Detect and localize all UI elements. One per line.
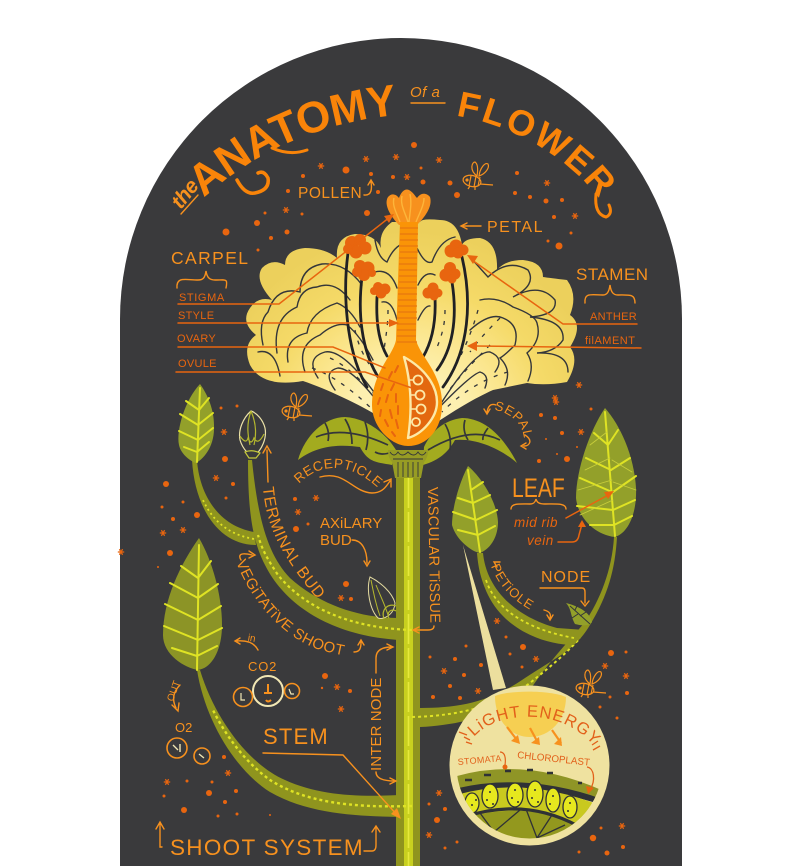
chloroplast pointer <box>587 767 594 790</box>
petiole label: PETiOLE <box>491 564 534 610</box>
vascular arrow <box>413 626 434 633</box>
shoot system arrows <box>156 822 380 851</box>
leaf: lower left <box>163 538 222 670</box>
vascular tissue label: VASCULAR TiSSUE <box>424 487 442 623</box>
title underline <box>181 195 198 214</box>
oxygen labels: OUT <box>165 679 183 703</box>
title <box>167 84 614 219</box>
stigma label: STIGMA <box>179 292 225 304</box>
ovule label: OVULE <box>178 358 217 370</box>
ovary label: OVARY <box>177 333 216 345</box>
pistil <box>372 189 442 446</box>
stomata pores <box>465 770 582 783</box>
stem core <box>404 475 413 866</box>
carpel brace <box>177 271 227 288</box>
style label: STYLE <box>178 310 214 322</box>
terminal bud label: TERMINAL BUD <box>263 486 324 597</box>
branch: lower left <box>197 670 412 817</box>
carpel labels <box>171 214 412 388</box>
petal contour lines left <box>258 240 400 412</box>
title swash under R <box>596 194 610 217</box>
lower veins <box>480 809 565 838</box>
stamens <box>343 234 468 387</box>
arch background <box>120 38 682 866</box>
ovules <box>410 380 417 422</box>
anthers <box>343 234 468 300</box>
internode label: INTER NODE <box>368 677 385 771</box>
leaf: big right <box>576 408 636 537</box>
pollen arrow <box>364 180 374 195</box>
light energy circle <box>450 686 610 846</box>
branch: vegetative shoot <box>248 460 412 640</box>
title swash under N <box>237 172 268 193</box>
stigma detail <box>393 194 424 222</box>
shoot system label: SHOOT SYSTEM <box>170 835 364 860</box>
receptacle arrow <box>320 476 391 493</box>
filament pointer <box>475 346 641 348</box>
oxygen molecules <box>167 738 210 764</box>
dark band <box>460 782 596 802</box>
petal contour lines right <box>417 237 568 415</box>
axilary bud label: AXiLARY <box>320 515 382 532</box>
carbon dioxide labels: CO2 <box>248 659 277 674</box>
filament label: filAMENT <box>585 335 635 347</box>
internode arrows <box>376 644 396 784</box>
sepal left <box>298 417 396 465</box>
leaf: node bud <box>566 603 592 625</box>
stigma pointer <box>178 217 390 304</box>
light label: LiGHT ENERGY <box>467 705 602 742</box>
title underline of a <box>411 102 445 104</box>
title word: the: the <box>167 175 204 213</box>
light beam <box>463 545 506 690</box>
stem outer <box>396 475 420 866</box>
bee left <box>281 393 312 421</box>
bee top <box>462 162 493 190</box>
vein arrow <box>558 524 582 542</box>
leaf label: LEAF <box>512 474 565 504</box>
vegitative shoot arrows <box>240 551 364 652</box>
stem label: STEM <box>263 724 329 749</box>
style stripes <box>397 228 418 342</box>
terminal bud <box>240 411 265 458</box>
circle base <box>450 686 610 846</box>
stamen heading: STAMEN <box>576 265 649 284</box>
lower dark line <box>464 809 578 826</box>
node arrow <box>540 588 589 606</box>
cells <box>465 781 577 818</box>
flower petals <box>246 219 577 430</box>
axillary bud <box>368 577 396 618</box>
node label: NODE <box>541 569 591 586</box>
anther label: ANTHER <box>590 311 637 323</box>
cell background <box>462 787 592 823</box>
axilary bud label <box>320 515 382 549</box>
ovule pointer <box>176 372 412 388</box>
midrib label: mid rib <box>514 515 558 530</box>
petiole arrows <box>494 562 553 620</box>
stem pointer <box>263 753 398 816</box>
title swash under T <box>272 148 307 153</box>
leaf: top left <box>178 384 214 463</box>
stamen labels <box>467 255 649 351</box>
infographic <box>118 38 682 866</box>
stamen brace <box>585 285 635 303</box>
scattered pollen dots <box>157 142 629 856</box>
light rays left and right <box>459 732 600 750</box>
carbon dioxide labels: in <box>247 633 256 645</box>
leaf: small right <box>452 466 498 553</box>
ovary dashes <box>378 366 398 436</box>
stigma <box>387 189 431 225</box>
stomata pore marker <box>502 764 508 770</box>
sun arrowheads <box>511 735 562 746</box>
style pointer <box>178 322 394 324</box>
petal outline <box>246 219 577 430</box>
anther pointer <box>472 260 637 324</box>
carbon dioxide molecules <box>234 676 300 706</box>
vein label: vein <box>527 533 554 548</box>
title word: of a: Of a <box>410 84 440 101</box>
lower tissue <box>464 797 589 838</box>
pollen label: POLLEN <box>298 185 362 202</box>
style and ovary <box>372 222 442 446</box>
terminal bud arrow <box>263 446 271 482</box>
sepal label: SEPAL <box>495 402 532 438</box>
ovary pointer <box>178 347 385 368</box>
sun arrows <box>507 727 561 743</box>
vegitative shoot label: VEGiTATiVE SHOOT <box>238 558 345 655</box>
scattered stars <box>118 154 629 838</box>
carbon dioxide labels <box>235 633 277 674</box>
midrib arrow <box>566 494 610 518</box>
ovary cutaway <box>404 357 437 438</box>
receptacle label: RECEPTICLE <box>294 458 383 487</box>
chloroplast label: CHLOROPLAST <box>517 750 590 769</box>
axilary bud label: BUD <box>320 532 352 549</box>
branch: lower right to big leaf <box>412 537 617 727</box>
filaments <box>346 253 468 387</box>
sun <box>495 692 566 737</box>
leaf brace <box>511 499 566 509</box>
branch: side shoot to top leaf <box>192 460 256 545</box>
carpel heading: CARPEL <box>171 248 249 268</box>
title word: flower: FLOWER <box>458 92 614 198</box>
cell dots <box>471 789 571 812</box>
receptacle <box>388 450 428 478</box>
stomata label: STOMATA <box>457 753 502 767</box>
oxygen labels <box>165 679 192 735</box>
bee right <box>575 670 606 698</box>
sepal right <box>423 418 517 465</box>
stem highlight <box>408 478 410 866</box>
petal arrow <box>461 223 481 229</box>
oxygen labels: O2 <box>175 720 192 735</box>
title word: anatomy: ANATOMY <box>194 84 393 197</box>
epidermis <box>457 769 598 800</box>
axilary bud arrow <box>352 540 370 566</box>
branch: petiole to small leaf <box>477 553 585 645</box>
stem <box>396 475 420 866</box>
petal label: PETAL <box>487 219 544 236</box>
sepal arrows <box>484 404 530 449</box>
leaf cross section <box>457 768 598 838</box>
stomata pointer <box>500 752 505 765</box>
